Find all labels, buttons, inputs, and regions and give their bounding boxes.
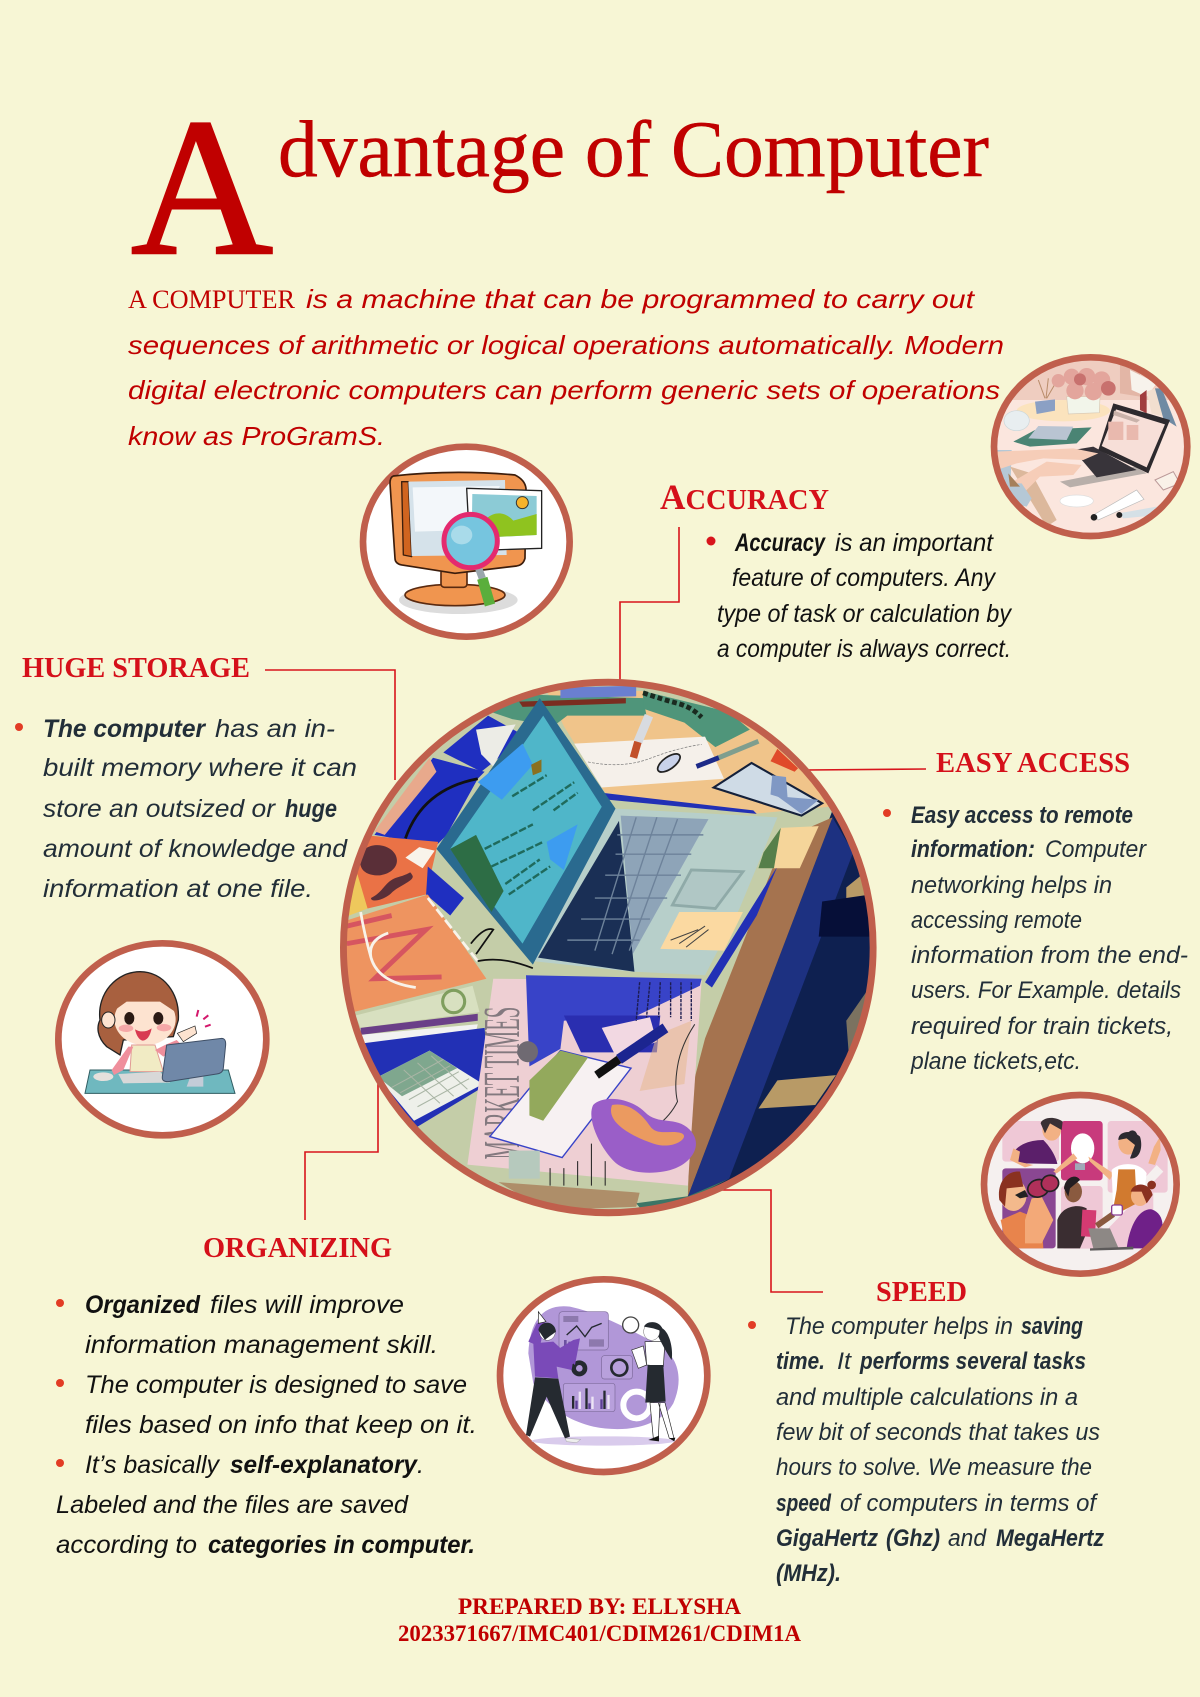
icon: monitor with magnifying glass	[363, 447, 570, 637]
body text: organizing: according to	[56, 1531, 197, 1559]
panel: easy access	[883, 747, 1188, 1075]
body text: accuracy: is an important	[835, 529, 994, 557]
title: A	[131, 79, 273, 296]
body text: accuracy	[717, 529, 1012, 663]
body text: easy access: plane tickets,etc.	[910, 1048, 1081, 1075]
panel: accuracy	[660, 477, 1012, 663]
body text: speed	[776, 1313, 1104, 1587]
main circular illustration: desk with laptop: MARKET TIMES	[475, 1007, 531, 1159]
heading: organizing: ORGANIZING	[203, 1232, 392, 1264]
body text: speed: speed	[776, 1490, 832, 1517]
body text: organizing: .	[417, 1451, 424, 1479]
body text: organizing: It’s basically	[85, 1451, 220, 1479]
heading: accuracy: ACCURACY	[660, 477, 829, 517]
body text: speed: hours to solve. We measure the	[776, 1454, 1092, 1481]
title: dvantage of Computer	[278, 106, 989, 194]
icon: team collaboration	[984, 1095, 1177, 1274]
body text: easy access: information from the end-	[911, 942, 1188, 969]
bullets	[56, 1299, 64, 1467]
body text: organizing: Labeled and the files are saved	[56, 1491, 409, 1519]
body text: organizing: files based on info that keep on it.	[85, 1411, 477, 1439]
body text: accuracy: Accuracy	[734, 529, 826, 557]
heading: speed: SPEED	[876, 1276, 967, 1308]
intro text block: is a machine that can be programmed to carry out	[306, 284, 976, 314]
main circle ring	[343, 682, 873, 1213]
body text: easy access: accessing remote	[911, 907, 1082, 934]
intro text block	[128, 284, 1004, 451]
body text: speed: performs several tasks	[859, 1348, 1086, 1375]
body text: speed: GigaHertz	[776, 1525, 878, 1552]
body text: huge storage: amount of knowledge and	[43, 835, 348, 863]
heading: easy access: EASY ACCESS	[936, 747, 1130, 779]
intro text block: A COMPUTER	[128, 285, 296, 314]
body text: accuracy: a computer is always correct.	[717, 635, 1011, 663]
body text: speed: It	[837, 1348, 852, 1375]
body text: easy access	[910, 802, 1188, 1075]
connector: huge storage	[265, 670, 395, 780]
body text: huge storage: has an in-	[215, 715, 335, 743]
body text: easy access: networking helps in	[911, 872, 1112, 899]
bullet	[706, 536, 716, 546]
connector: organizing	[305, 1084, 378, 1220]
body text: huge storage: built memory where it can	[43, 754, 357, 782]
body text: organizing: categories in computer.	[208, 1531, 475, 1559]
body text: huge storage: store an outsized or	[43, 795, 277, 823]
main circular illustration: desk with laptop	[340, 670, 880, 1220]
panel: huge storage	[15, 652, 357, 903]
bullet	[748, 1321, 756, 1329]
body text: accuracy: feature of computers. Any	[732, 564, 996, 592]
intro text block: know as ProGramS.	[128, 421, 385, 451]
icon: woman at computer	[58, 943, 266, 1135]
body text: speed: and	[948, 1525, 987, 1552]
body text: huge storage: huge	[285, 795, 337, 823]
body text: accuracy: type of task or calculation by	[717, 600, 1012, 628]
body text: speed: (MHz).	[776, 1560, 841, 1587]
icon: woman typing on laptop (top right circle)	[990, 353, 1193, 536]
body text: organizing: files will improve	[210, 1291, 404, 1319]
heading: huge storage: HUGE STORAGE	[22, 652, 250, 684]
panel: speed	[748, 1276, 1104, 1587]
body text: speed: time.	[776, 1348, 825, 1375]
intro text block: sequences of arithmetic or logical operations automatically. Modern	[128, 330, 1004, 360]
title	[131, 79, 989, 296]
body text: speed: saving	[1021, 1313, 1083, 1340]
footer: prepared by: PREPARED BY: ELLYSHA	[458, 1594, 741, 1619]
bullet	[883, 809, 891, 817]
body text: speed: of computers in terms of	[840, 1490, 1098, 1517]
connector: accuracy	[620, 527, 679, 682]
panel: organizing	[56, 1232, 477, 1559]
body text: speed: The computer helps in	[785, 1313, 1013, 1340]
body text: huge storage: The computer	[43, 715, 206, 743]
body text: speed: MegaHertz	[996, 1525, 1104, 1552]
body text: easy access: information:	[911, 836, 1035, 863]
icon: analytics team in purple	[500, 1279, 707, 1472]
connector: speed	[718, 1190, 823, 1292]
footer: prepared by: 2023371667/IMC401/CDIM261/CDIM1A	[398, 1621, 801, 1646]
body text: easy access: Easy access to remote	[911, 802, 1133, 829]
body text: organizing: self-explanatory	[230, 1451, 418, 1479]
body text: organizing	[56, 1291, 477, 1559]
body text: speed: few bit of seconds that takes us	[776, 1419, 1100, 1446]
connector: easy access	[806, 769, 926, 770]
body text: easy access: users. For Example. details	[911, 977, 1181, 1004]
body text: organizing: Organized	[85, 1291, 201, 1319]
intro text block: digital electronic computers can perform generic sets of operations	[128, 375, 1000, 405]
body text: organizing: information management skill.	[85, 1331, 438, 1359]
bullet	[15, 723, 23, 731]
body text: easy access: Computer	[1045, 836, 1147, 863]
footer: prepared by	[398, 1594, 801, 1646]
body text: organizing: The computer is designed to save	[85, 1371, 467, 1399]
body text: speed: and multiple calculations in a	[776, 1384, 1078, 1411]
body text: speed: (Ghz)	[886, 1525, 940, 1552]
body text: easy access: required for train tickets,	[911, 1013, 1173, 1040]
body text: huge storage	[43, 715, 357, 903]
body text: huge storage: information at one file.	[43, 875, 313, 903]
